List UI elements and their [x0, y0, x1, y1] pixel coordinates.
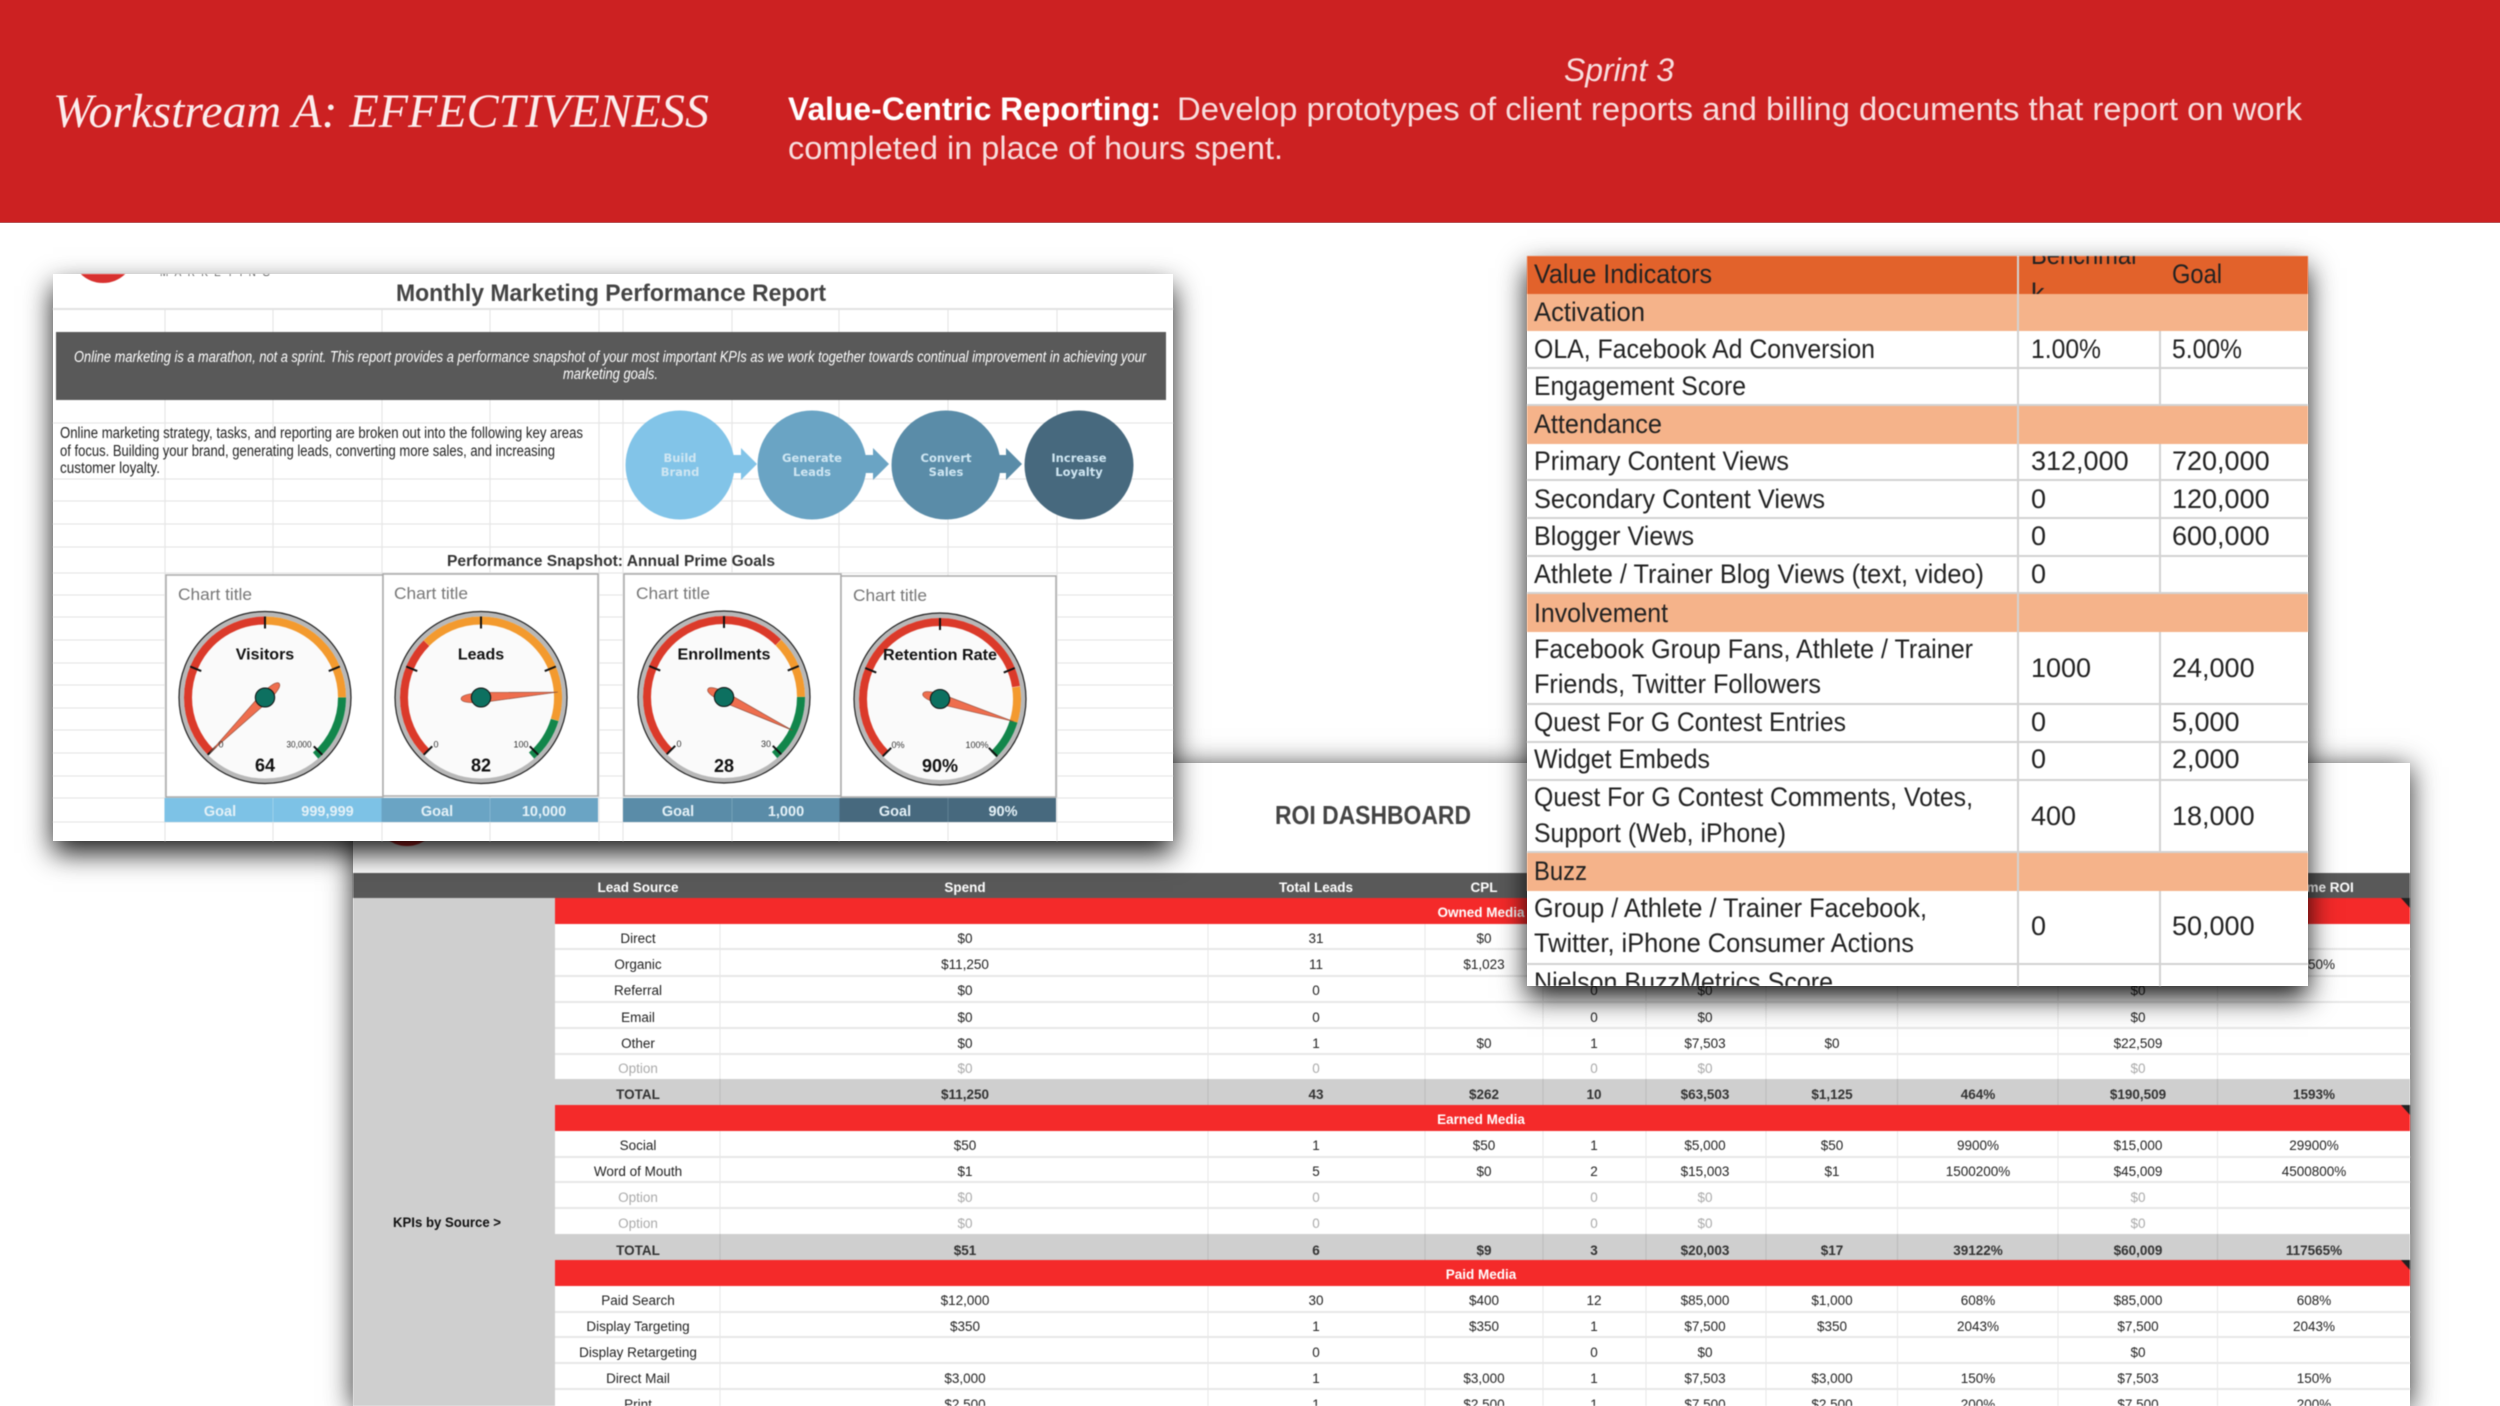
row: owned total: $190,509 — [2110, 1087, 2166, 1102]
row: contest entries — [1534, 707, 2240, 737]
row: email: 0 — [1590, 1010, 1598, 1025]
table header row — [1526, 255, 2309, 295]
row: other: $7,503 — [1684, 1036, 1726, 1051]
intro band: marketing goals. — [563, 366, 658, 383]
gauge: enrollments: 30 — [761, 739, 771, 749]
section: attendance: Attendance — [1534, 409, 1662, 439]
row: earned total: 117565% — [2286, 1243, 2342, 1258]
gauge: retention rate: Retention Rate — [883, 647, 997, 664]
row: primary content views: Primary Content Views — [1534, 446, 1789, 476]
goal bar: enrollments: 1,000 — [768, 804, 804, 820]
row: earned total: $51 — [954, 1243, 977, 1258]
row: word of mouth: $45,009 — [2114, 1164, 2162, 1179]
logo: clipped red circle — [375, 782, 439, 846]
gauge: enrollments: 28 — [714, 756, 734, 776]
row: display targeting: Display Targeting — [586, 1319, 690, 1334]
title: Workstream A: Workstream A: EFFECTIVENESS — [53, 85, 709, 138]
row: display retargeting: 0 — [1312, 1345, 1320, 1360]
row: earned total: $20,003 — [1681, 1243, 1730, 1258]
row: contest entries: Quest For G Contest Entries — [1534, 707, 1846, 737]
row: option: Option — [618, 1190, 658, 1205]
table header row: Spend — [944, 880, 986, 895]
row: consumer actions: Group / Athlete / Trainer Facebook, — [1534, 893, 1927, 923]
chart card: leads — [372, 574, 598, 806]
section: buzz: Buzz — [1534, 856, 1587, 886]
step: generate leads: Generate — [782, 451, 842, 465]
row: direct — [620, 931, 1492, 946]
gauge: visitors: 64 — [255, 756, 275, 776]
row: option: $0 — [2130, 1061, 2146, 1076]
row: social: $50 — [954, 1138, 976, 1153]
row: social: $15,000 — [2114, 1138, 2162, 1153]
row: contest comments: 18,000 — [2172, 801, 2255, 831]
row: option: 0 — [1590, 1190, 1598, 1205]
row: owned total: $262 — [1469, 1087, 1499, 1102]
gauge: visitors: 0 — [218, 740, 224, 750]
row: word of mouth: 2 — [1590, 1164, 1598, 1179]
row: earned total: 39122% — [1953, 1243, 2003, 1258]
row: blogger views: 600,000 — [2172, 521, 2270, 551]
row: option: $0 — [1697, 1061, 1713, 1076]
row: word of mouth: 5 — [1312, 1164, 1320, 1179]
row: owned total: $11,250 — [941, 1087, 989, 1102]
section bar: paid media: Paid Media — [1446, 1267, 1517, 1282]
row: referral: $0 — [1697, 983, 1713, 998]
row: primary content views: 312,000 — [2031, 446, 2129, 476]
row: earned total: $9 — [1476, 1243, 1492, 1258]
row: OLA conversion: 1.00% — [2031, 334, 2101, 364]
row: widget embeds: Widget Embeds — [1534, 744, 1710, 774]
heading: ROI dashboard: ROI DASHBOARD — [1275, 800, 1471, 830]
gauge: enrollments: 0 — [676, 739, 682, 749]
row: contest comments: Quest For G Contest Comments, Votes, — [1534, 782, 1973, 812]
row: other: $0 — [957, 1036, 973, 1051]
row: blogger views — [1534, 521, 2270, 551]
row: paid search — [601, 1293, 2331, 1308]
row: direct mail: $7,503 — [2117, 1371, 2159, 1386]
row: referral — [614, 983, 2146, 998]
row: option: $0 — [2130, 1190, 2146, 1205]
KPI side column: KPIs by Source > — [393, 1215, 501, 1230]
row: option: 0 — [1312, 1061, 1320, 1076]
intro band — [56, 332, 1166, 400]
row: display retargeting: $0 — [1697, 1345, 1713, 1360]
row: direct mail: $3,000 — [1811, 1371, 1853, 1386]
row: OLA conversion — [1534, 334, 2242, 364]
goal bar: visitors: Goal — [204, 804, 236, 820]
row: paid search: $12,000 — [941, 1293, 989, 1308]
table header row: Goal — [2172, 259, 2222, 289]
row: referral: 0 — [1312, 983, 1320, 998]
row: widget embeds: 2,000 — [2172, 744, 2240, 774]
section: involvement — [1534, 598, 2255, 848]
sprint description: Develop prototypes of client reports and billing documents that report on work — [1177, 91, 2303, 127]
row: email: 0 — [1312, 1010, 1320, 1025]
row: organic: 11 — [1309, 957, 1323, 972]
section: activation — [1534, 297, 2242, 401]
row: direct mail — [606, 1371, 2331, 1386]
row: paid search: 608% — [1961, 1293, 1995, 1308]
row: display targeting: $7,500 — [2117, 1319, 2159, 1334]
row: social: Social — [620, 1138, 656, 1153]
row: earned total: $60,009 — [2114, 1243, 2162, 1258]
row: social: $50 — [1821, 1138, 1843, 1153]
row: print — [624, 1397, 2331, 1406]
section: involvement: Involvement — [1534, 598, 1668, 628]
gauge: enrollments — [615, 588, 833, 806]
step: build brand: Build — [663, 451, 697, 465]
row: display retargeting: Display Retargeting — [579, 1345, 697, 1360]
sprint description — [788, 91, 2303, 166]
table header row: Value Indicators — [1534, 259, 1712, 289]
row: display retargeting — [579, 1345, 2146, 1360]
row: primary content views — [1534, 446, 2270, 476]
row: option: $0 — [957, 1061, 973, 1076]
row: organic: 1350% — [2293, 957, 2335, 972]
row: option — [618, 1190, 2146, 1205]
step: build brand — [626, 410, 734, 520]
gauge: visitors: Visitors — [236, 646, 294, 664]
row: word of mouth: 1500200% — [1946, 1164, 2010, 1179]
row: fans and followers — [1534, 634, 2255, 699]
goal bar: leads: 10,000 — [522, 804, 566, 820]
row: direct: $0 — [957, 931, 973, 946]
row: organic: Organic — [614, 957, 662, 972]
row: blogger views: 0 — [2031, 521, 2046, 551]
chart card: visitors: Chart title — [178, 585, 252, 604]
goal bar: visitors — [164, 798, 382, 822]
row: option: $0 — [957, 1216, 973, 1231]
sprint description: completed in place of hours spent. — [788, 130, 1283, 166]
row: display targeting: 1 — [1312, 1319, 1320, 1334]
gauge: enrollments: Enrollments — [678, 646, 771, 664]
row: consumer actions: 50,000 — [2172, 911, 2255, 941]
row: referral: 0 — [1590, 983, 1598, 998]
row: social: 9900% — [1957, 1138, 1999, 1153]
row: social: $5,000 — [1684, 1138, 1726, 1153]
row: option: 0 — [1590, 1216, 1598, 1231]
step: increase loyalty: Increase — [1051, 451, 1107, 465]
row: option: Option — [618, 1061, 658, 1076]
row: option: $0 — [1697, 1190, 1713, 1205]
row: widget embeds: 0 — [2031, 744, 2046, 774]
row: paid search: 608% — [2297, 1293, 2331, 1308]
text block: focus areas: customer loyalty. — [60, 460, 160, 477]
gauge: visitors: 30,000 — [286, 740, 312, 750]
row: blogger views: Blogger Views — [1534, 521, 1694, 551]
goal bar: leads — [382, 798, 598, 822]
row: earned total: $17 — [1821, 1243, 1843, 1258]
step: increase loyalty — [1024, 410, 1134, 520]
row: consumer actions — [1534, 893, 2255, 958]
row: direct: Direct — [620, 931, 656, 946]
row: paid search: $85,000 — [2114, 1293, 2162, 1308]
heading: report title: Monthly Marketing Performance Report — [396, 280, 826, 307]
text block: focus areas — [60, 425, 583, 477]
section bands — [1527, 294, 2308, 891]
gauge: retention rate: 100% — [965, 740, 989, 750]
row: word of mouth — [594, 1164, 2346, 1179]
row: display targeting: $350 — [1817, 1319, 1847, 1334]
row: paid search: $400 — [1469, 1293, 1499, 1308]
row: owned total: 464% — [1961, 1087, 1995, 1102]
arrow: brand to leads — [733, 448, 757, 480]
row: widget embeds — [1534, 744, 2240, 774]
row: blog views: 0 — [2031, 559, 2046, 589]
row: owned total: 1593% — [2293, 1087, 2335, 1102]
table header row — [353, 873, 2410, 898]
step: build brand: Brand — [661, 465, 699, 479]
step: generate leads — [758, 410, 866, 520]
row: OLA conversion: 5.00% — [2172, 334, 2242, 364]
row: word of mouth: 4500800% — [2282, 1164, 2346, 1179]
heading: performance snapshot: Performance Snapshot: Annual Prime Goals — [447, 553, 775, 570]
table header row: Lifetime ROI — [2274, 880, 2354, 895]
row: option: Option — [618, 1216, 658, 1231]
logo: clipped red circle and wordmark — [71, 219, 270, 283]
row: display targeting — [586, 1319, 2335, 1334]
step: convert sales: Sales — [929, 465, 963, 479]
row: other: $0 — [1476, 1036, 1492, 1051]
row: other: $0 — [1824, 1036, 1840, 1051]
row: display targeting: $350 — [950, 1319, 980, 1334]
section: attendance — [1534, 409, 2270, 589]
row: option: $0 — [2130, 1216, 2146, 1231]
row: direct mail: $3,000 — [1463, 1371, 1505, 1386]
row: owned total: 43 — [1308, 1087, 1324, 1102]
row: organic: $11,250 — [941, 957, 989, 972]
chart card: enrollments: Chart title — [636, 584, 710, 603]
row: direct: $0 — [1476, 931, 1492, 946]
gauge: leads: 0 — [433, 740, 439, 750]
goal bar: leads: Goal — [421, 804, 453, 820]
row: primary content views: 720,000 — [2172, 446, 2270, 476]
gauge: leads: 100 — [513, 740, 529, 750]
row: social: 1 — [1590, 1138, 1598, 1153]
chart card: enrollments — [615, 574, 841, 806]
panel: monthly marketing performance report — [53, 274, 1173, 841]
row: other: 1 — [1312, 1036, 1320, 1051]
row: social: $50 — [1473, 1138, 1495, 1153]
row: owned total: $63,503 — [1681, 1087, 1730, 1102]
row: contest entries: 0 — [2031, 707, 2046, 737]
row: display targeting: 2043% — [2293, 1319, 2335, 1334]
row: word of mouth: $0 — [1476, 1164, 1492, 1179]
row: organic — [614, 957, 2335, 972]
row: direct mail: 1 — [1590, 1371, 1598, 1386]
row: social — [620, 1138, 2339, 1153]
row: consumer actions: 0 — [2031, 911, 2046, 941]
row: direct: 31 — [1308, 931, 1324, 946]
row: option — [618, 1216, 2146, 1231]
row: display targeting: 1 — [1590, 1319, 1598, 1334]
table header row: k — [2031, 278, 2045, 308]
row: earned total: TOTAL — [616, 1243, 660, 1258]
KPI side column — [353, 898, 555, 1406]
section bar: earned media: Earned Media — [1437, 1112, 1525, 1127]
table header row: Total Leads — [1279, 880, 1353, 895]
step: increase loyalty: Loyalty — [1055, 465, 1103, 479]
gauge: retention rate — [831, 590, 1049, 808]
gauge: leads: 82 — [471, 756, 491, 776]
panel: value indicators table — [1527, 256, 2308, 986]
goal bar: retention rate: Goal — [879, 804, 911, 820]
row: earned total: 3 — [1590, 1243, 1598, 1258]
goal bar: enrollments — [623, 798, 840, 822]
gauge: retention rate: 0% — [891, 740, 905, 750]
row: option — [618, 1061, 2146, 1076]
row: word of mouth: $15,003 — [1681, 1164, 1729, 1179]
total row backgrounds — [555, 1079, 2410, 1260]
row: option: $0 — [957, 1190, 973, 1205]
row: email: $0 — [957, 1010, 973, 1025]
row: direct mail: 150% — [1961, 1371, 1995, 1386]
panel: ROI dashboard — [353, 763, 2410, 1406]
row: other: $22,509 — [2114, 1036, 2162, 1051]
row: engagement score: Engagement Score — [1534, 371, 1746, 401]
row: other: Other — [621, 1036, 655, 1051]
row: owned total: 10 — [1586, 1087, 1602, 1102]
section bar: earned media — [555, 1105, 2410, 1131]
row: referral: Referral — [614, 983, 662, 998]
row: fans and followers: 1000 — [2031, 653, 2091, 683]
step: generate leads: Leads — [793, 465, 831, 479]
goal bar: retention rate: 90% — [988, 804, 1018, 820]
process flow: focus areas — [626, 410, 1134, 520]
row: owned total: TOTAL — [616, 1087, 660, 1102]
row: OLA conversion: OLA, Facebook Ad Conversion — [1534, 334, 1875, 364]
row: consumer actions: Twitter, iPhone Consumer Actions — [1534, 928, 1914, 958]
row: email — [621, 1010, 2146, 1025]
row: referral: $0 — [2130, 983, 2146, 998]
goal bar: enrollments: Goal — [662, 804, 694, 820]
table header row: CPL — [1470, 880, 1498, 895]
arrow: leads to sales — [865, 448, 889, 480]
arrow: sales to loyalty — [998, 448, 1022, 480]
row: secondary content views: Secondary Content Views — [1534, 484, 1825, 514]
row: fans and followers: Friends, Twitter Followers — [1534, 669, 1821, 699]
row: owned total: $1,125 — [1811, 1087, 1853, 1102]
chart card: leads: Chart title — [394, 584, 468, 603]
row: secondary content views: 0 — [2031, 484, 2046, 514]
text block: focus areas: Online marketing strategy, tasks, and reporting are broken out into the following key areas — [60, 425, 583, 442]
chart card: visitors — [156, 575, 383, 806]
chart card: retention rate: Chart title — [853, 586, 927, 605]
section bar: paid media — [555, 1260, 2410, 1286]
chart card: retention rate — [831, 576, 1056, 808]
section: buzz — [1534, 856, 2255, 997]
section bar: owned media: Owned Media — [1437, 905, 1525, 920]
row: contest entries: 5,000 — [2172, 707, 2240, 737]
row: email: Email — [621, 1010, 655, 1025]
row: direct mail: 150% — [2297, 1371, 2331, 1386]
row: owned total — [616, 1087, 2335, 1102]
row: blog views: Athlete / Trainer Blog Views (text, video) — [1534, 559, 1984, 589]
row: contest comments: Support (Web, iPhone) — [1534, 818, 1786, 848]
gauge: retention rate: 90% — [922, 756, 958, 776]
row: contest comments: 400 — [2031, 801, 2076, 831]
row: fans and followers: Facebook Group Fans, Athlete / Trainer — [1534, 634, 1973, 664]
goal bar: visitors: 999,999 — [301, 804, 354, 820]
row: secondary content views: 120,000 — [2172, 484, 2270, 514]
row: paid search: $1,000 — [1811, 1293, 1853, 1308]
row: option: $0 — [1697, 1216, 1713, 1231]
gauge: leads: Leads — [458, 646, 504, 664]
row: paid search: Paid Search — [601, 1293, 675, 1308]
row: display targeting: 2043% — [1957, 1319, 1999, 1334]
row: display retargeting: 0 — [1590, 1345, 1598, 1360]
row: other: 1 — [1590, 1036, 1598, 1051]
step: convert sales — [892, 410, 1000, 520]
row: direct mail: 1 — [1312, 1371, 1320, 1386]
gauge: leads — [372, 589, 590, 806]
row: fans and followers: 24,000 — [2172, 653, 2255, 683]
row: referral: $0 — [957, 983, 973, 998]
row: word of mouth: $1 — [1824, 1164, 1840, 1179]
row: display targeting: $350 — [1469, 1319, 1499, 1334]
sprint label: Sprint 3 — [1564, 52, 1674, 88]
sprint description: Value-Centric Reporting: — [788, 91, 1161, 127]
row: social: 29900% — [2289, 1138, 2339, 1153]
gauge: visitors — [156, 589, 374, 806]
section: activation: Activation — [1534, 297, 1645, 327]
row: paid search: $85,000 — [1681, 1293, 1729, 1308]
row: word of mouth: $1 — [957, 1164, 973, 1179]
section bar: owned media — [555, 898, 2410, 924]
row: organic: $1,023 — [1463, 957, 1505, 972]
row: social: 1 — [1312, 1138, 1320, 1153]
row: paid search: 12 — [1586, 1293, 1602, 1308]
row: email: $0 — [1697, 1010, 1713, 1025]
row: email: $0 — [2130, 1010, 2146, 1025]
table header row: Lead Source — [597, 880, 679, 895]
text block: focus areas: of focus. Building your brand, generating leads, converting more sales, and increasing — [60, 443, 555, 460]
row: word of mouth: Word of Mouth — [594, 1164, 682, 1179]
row: earned total — [616, 1243, 2342, 1258]
row: direct mail: Direct Mail — [606, 1371, 670, 1386]
row: option: 0 — [1312, 1190, 1320, 1205]
goal bar: retention rate — [840, 798, 1056, 822]
step: convert sales: Convert — [920, 451, 972, 465]
row: option: 0 — [1312, 1216, 1320, 1231]
row: direct mail: $3,000 — [944, 1371, 986, 1386]
row: option: 0 — [1590, 1061, 1598, 1076]
header banner — [0, 0, 2500, 223]
row: display retargeting: $0 — [2130, 1345, 2146, 1360]
row: earned total: 6 — [1312, 1243, 1320, 1258]
row: direct mail: $7,503 — [1684, 1371, 1726, 1386]
row: display targeting: $7,500 — [1684, 1319, 1726, 1334]
row: other — [621, 1036, 2162, 1051]
row: paid search: 30 — [1308, 1293, 1324, 1308]
row: contest comments — [1534, 782, 2255, 848]
row: secondary content views — [1534, 484, 2270, 514]
